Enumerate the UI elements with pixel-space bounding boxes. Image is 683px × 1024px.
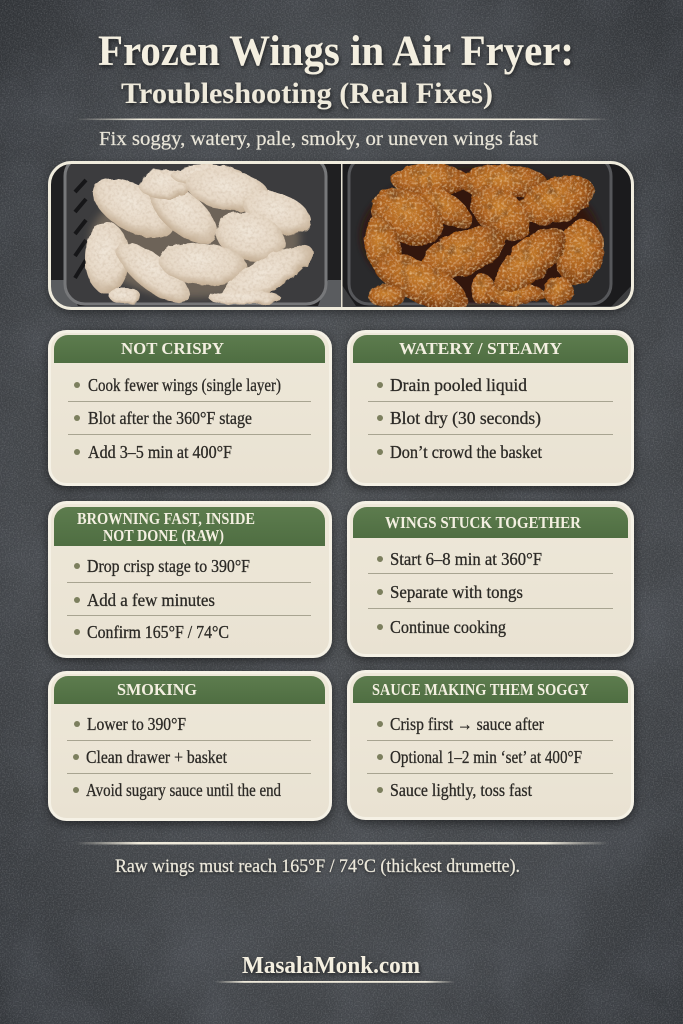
list: smoking fixes: Avoid sugary sauce until the end	[86, 780, 281, 800]
heading: not crispy: NOT CRISPY	[121, 339, 224, 358]
heading: wings stuck together: WINGS STUCK TOGETHER	[385, 513, 582, 532]
list: smoking fixes	[67, 714, 311, 800]
right photo: crispy golden wings in basket	[342, 164, 631, 307]
list: smoking fixes: Clean drawer + basket	[86, 747, 227, 767]
title	[98, 28, 574, 110]
list: watery fixes	[368, 375, 613, 462]
list: not crispy fixes: Add 3–5 min at 400°F	[88, 442, 232, 462]
left photo: pale soggy wings in basket	[51, 164, 341, 307]
heading line 2: Troubleshooting (Real Fixes)	[121, 77, 493, 110]
list: browning fixes	[67, 556, 311, 642]
heading: smoking: SMOKING	[117, 680, 197, 699]
panel: browning fast, inside not done	[50, 502, 330, 656]
panel: not crispy	[50, 332, 330, 484]
list: not crispy fixes	[68, 375, 311, 462]
list: stuck wings fixes	[368, 549, 613, 637]
heading: browning fast: NOT DONE (RAW)	[103, 526, 224, 545]
panel: smoking	[50, 672, 330, 820]
list: smoking fixes: Lower to 390°F	[87, 714, 186, 734]
list: stuck wings fixes: Separate with tongs	[390, 582, 523, 602]
list: stuck wings fixes: Continue cooking	[390, 617, 506, 637]
subtitle: Fix soggy, watery, pale, smoky, or uneven wings fast	[99, 128, 538, 150]
list: watery fixes: Don’t crowd the basket	[390, 442, 542, 462]
heading: sauce making them soggy: SAUCE MAKING THEM SOGGY	[372, 680, 589, 699]
heading: browning fast	[77, 509, 255, 545]
panel: sauce making them soggy	[348, 672, 632, 818]
list: browning fixes: Drop crisp stage to 390°F	[87, 556, 250, 576]
list: not crispy fixes: Cook fewer wings (single layer)	[88, 375, 281, 395]
list: not crispy fixes: Blot after the 360°F stage	[88, 408, 252, 428]
list: watery fixes: Drain pooled liquid	[390, 375, 527, 395]
list: browning fixes: Add a few minutes	[87, 590, 215, 610]
website credit: MasalaMonk.com	[242, 953, 420, 979]
panel: wings stuck together	[348, 502, 632, 656]
panel: watery / steamy	[348, 332, 632, 484]
safety note: Raw wings must reach 165°F / 74°C (thickest drumette).	[115, 857, 520, 877]
heading: browning fast: BROWNING FAST, INSIDE	[77, 509, 255, 528]
heading: watery / steamy: WATERY / STEAMY	[399, 339, 562, 358]
heading line 1: Frozen Wings in Air Fryer:	[98, 28, 574, 75]
list: sauce fixes: Sauce lightly, toss fast	[390, 780, 532, 800]
list: sauce fixes: Optional 1–2 min ‘set’ at 400°F	[390, 747, 582, 767]
list: watery fixes: Blot dry (30 seconds)	[390, 408, 541, 428]
list: sauce fixes	[367, 714, 613, 800]
photo panel: before and after baskets	[50, 156, 632, 322]
list: sauce fixes: Crisp first → sauce after	[390, 714, 544, 734]
list: browning fixes: Confirm 165°F / 74°C	[87, 622, 229, 642]
list: stuck wings fixes: Start 6–8 min at 360°F	[390, 549, 542, 569]
